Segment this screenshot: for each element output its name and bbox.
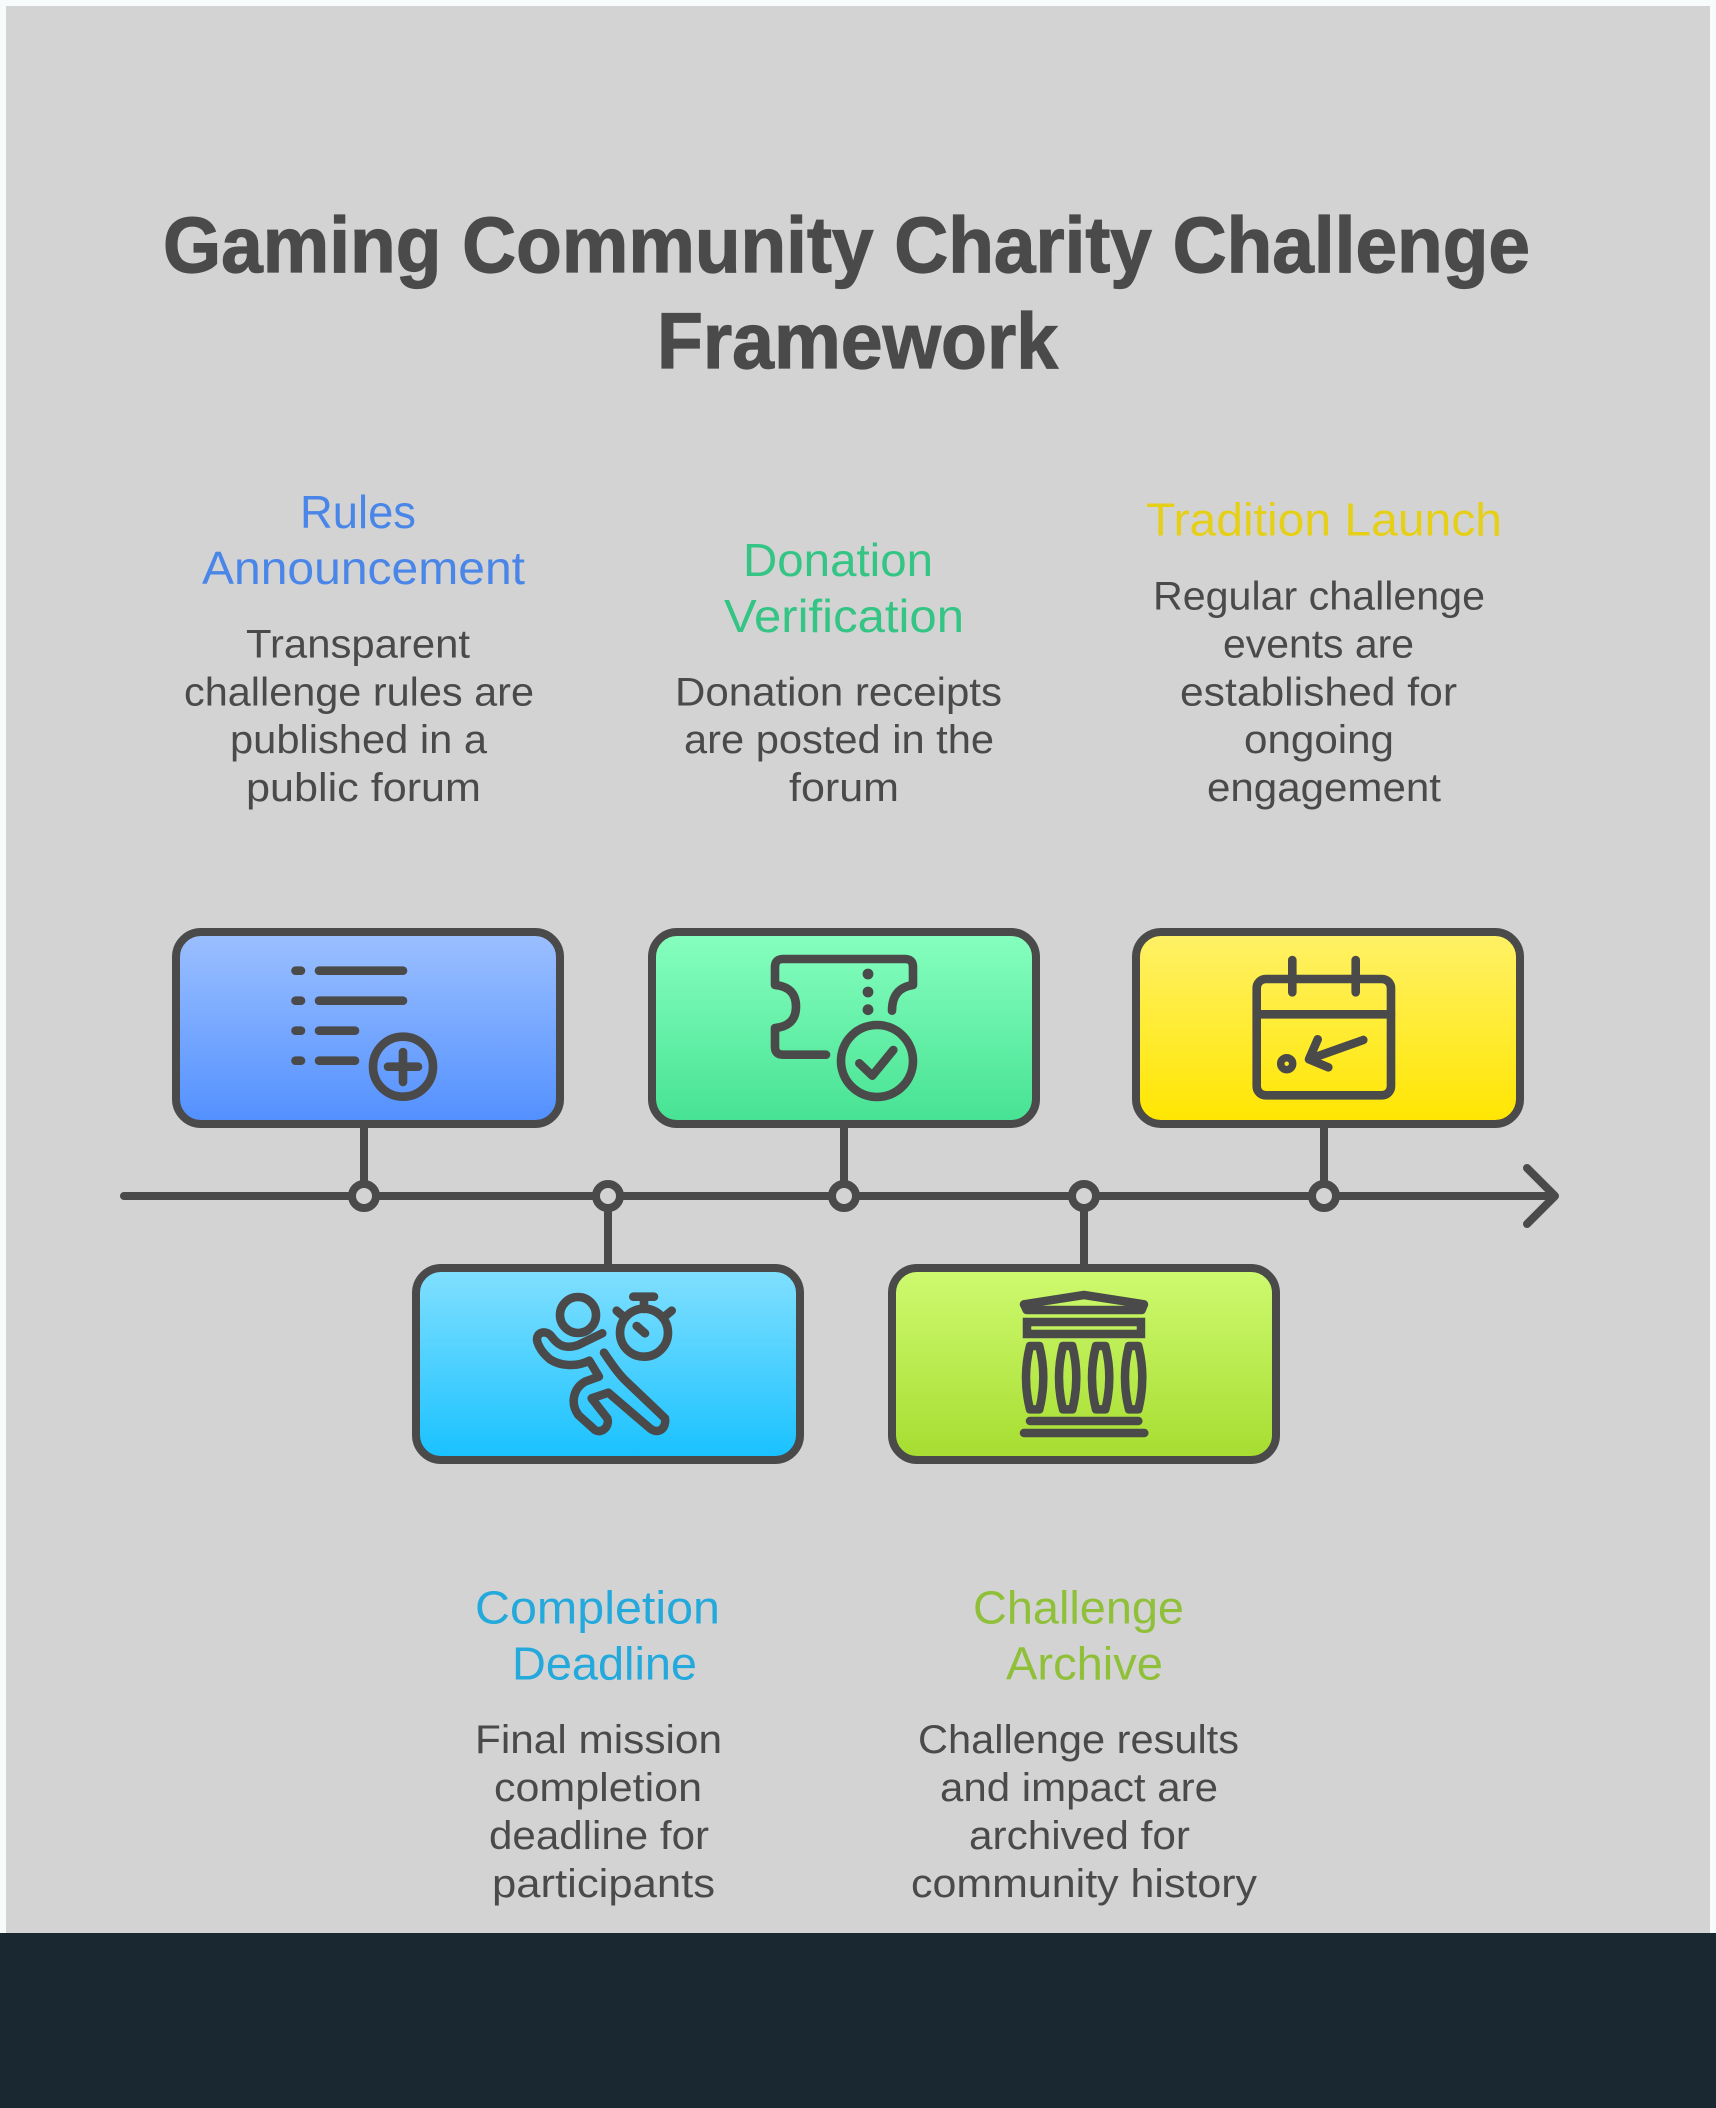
timeline nodes	[352, 1184, 1336, 1208]
description: donation verification	[675, 670, 1002, 810]
description: tradition launch: Regular challenge	[1153, 574, 1485, 618]
description: challenge archive: community history	[911, 1862, 1257, 1906]
heading: completion deadline: Deadline	[512, 1638, 697, 1690]
card: rules announcement	[176, 932, 560, 1124]
heading: donation verification	[724, 534, 964, 642]
connectors	[364, 1124, 1324, 1268]
heading: donation verification: Verification	[724, 590, 964, 642]
description: rules announcement: published in a	[230, 718, 487, 762]
timeline arrow	[124, 1168, 1555, 1224]
heading: challenge archive	[973, 1582, 1184, 1690]
description: rules announcement	[184, 622, 534, 810]
description: challenge archive: Challenge results	[918, 1718, 1239, 1762]
icon: list with plus	[296, 971, 433, 1097]
heading: donation verification: Donation	[743, 534, 933, 586]
description: tradition launch: events are	[1223, 622, 1414, 666]
icon: ticket with check	[775, 959, 913, 1097]
text block: rules announcement	[184, 486, 534, 810]
description: completion deadline: deadline for	[489, 1814, 709, 1858]
description: tradition launch: engagement	[1207, 766, 1441, 810]
description: tradition launch: ongoing	[1244, 718, 1394, 762]
description: challenge archive	[911, 1718, 1257, 1906]
text block: completion deadline	[475, 1582, 722, 1906]
description: tradition launch: established for	[1180, 670, 1457, 714]
title	[163, 200, 1530, 385]
description: rules announcement: Transparent	[246, 622, 470, 666]
description: donation verification: are posted in the	[684, 718, 994, 762]
icon: archive building	[1024, 1295, 1144, 1433]
description: completion deadline: participants	[492, 1862, 715, 1906]
description: completion deadline: completion	[494, 1766, 702, 1810]
description: challenge archive: and impact are	[940, 1766, 1218, 1810]
text block: donation verification	[675, 534, 1002, 810]
heading: tradition launch: Tradition Launch	[1146, 494, 1502, 546]
description: tradition launch	[1153, 574, 1485, 810]
description: challenge archive: archived for	[969, 1814, 1190, 1858]
heading: challenge archive: Challenge	[973, 1582, 1184, 1634]
description: completion deadline	[475, 1718, 722, 1906]
heading: challenge archive: Archive	[1006, 1638, 1163, 1690]
heading: rules announcement	[202, 486, 525, 594]
icon: calendar with arrow	[1257, 960, 1391, 1095]
heading: rules announcement: Rules	[300, 486, 416, 538]
heading: completion deadline	[475, 1582, 720, 1690]
card: donation verification	[652, 932, 1036, 1124]
icon: runner with stopwatch	[537, 1297, 672, 1431]
description: donation verification: Donation receipts	[675, 670, 1002, 714]
text block: tradition launch	[1146, 494, 1502, 810]
heading: completion deadline: Completion	[475, 1582, 720, 1634]
card: challenge archive	[892, 1268, 1276, 1460]
footer band	[0, 1933, 1716, 2108]
card: tradition launch	[1136, 932, 1520, 1124]
card: completion deadline	[416, 1268, 800, 1460]
heading: rules announcement: Announcement	[202, 542, 525, 594]
title: Framework	[657, 296, 1059, 385]
description: rules announcement: challenge rules are	[184, 670, 534, 714]
description: completion deadline: Final mission	[475, 1718, 722, 1762]
text block: challenge archive	[911, 1582, 1257, 1906]
title: Gaming Community Charity Challenge	[163, 200, 1530, 289]
description: donation verification: forum	[789, 766, 899, 810]
description: rules announcement: public forum	[246, 766, 481, 810]
